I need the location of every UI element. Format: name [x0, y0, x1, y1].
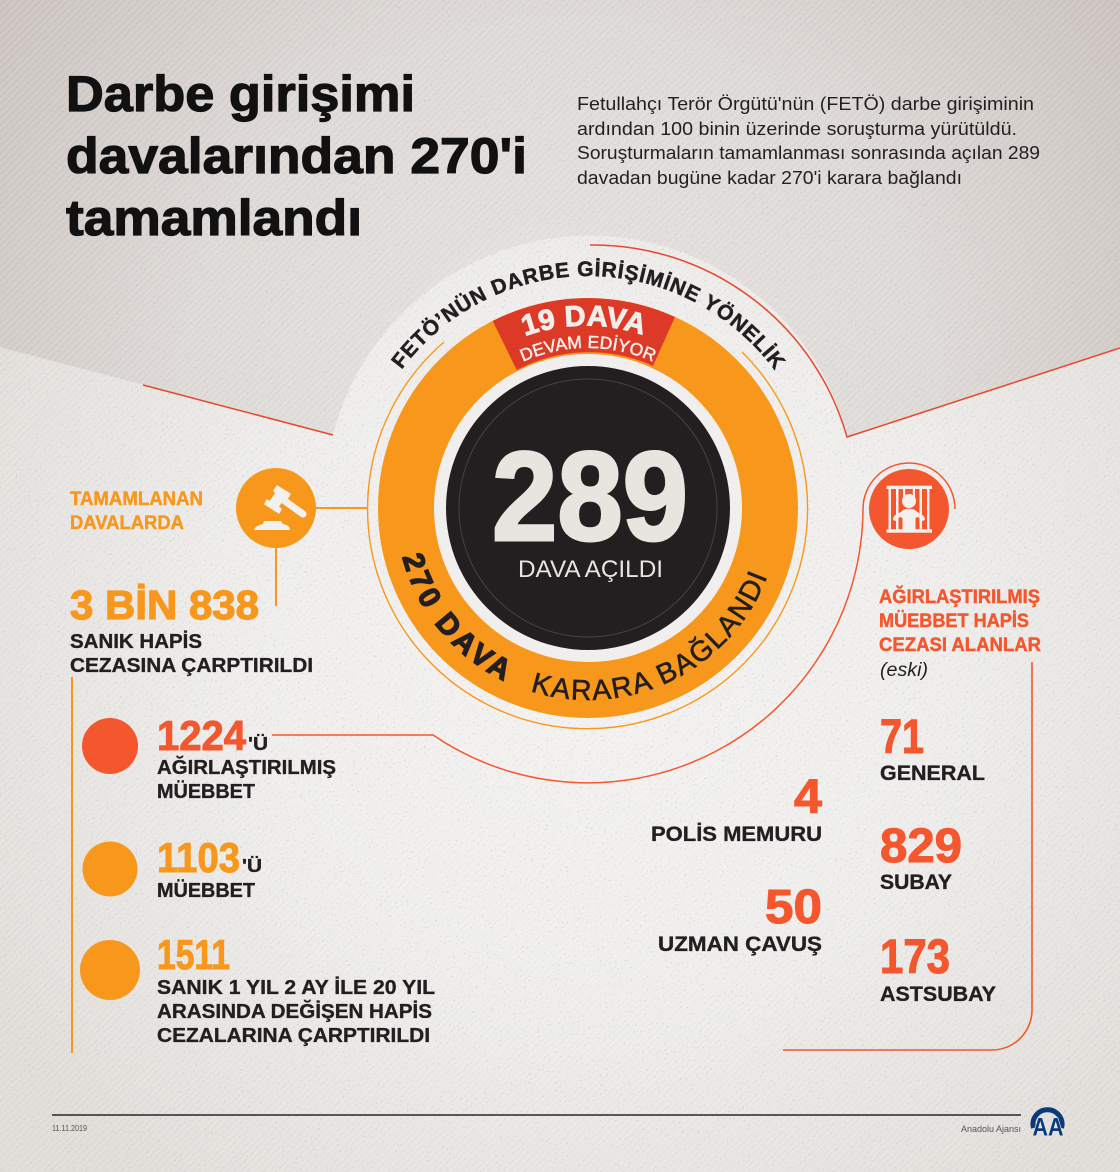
connector: gavel to donut [276, 508, 368, 606]
stat: general: GENERAL [880, 762, 985, 785]
title [66, 66, 527, 246]
icon: AA logo: AA [1032, 1114, 1064, 1142]
intro text: Soruşturmaların tamamlanması sonrasında açılan 289 [577, 143, 1040, 163]
item: 1103 life [82, 834, 262, 902]
stat: non-commissioned officer: 173 [880, 931, 950, 984]
stat: police officer [651, 771, 822, 846]
centre disc [446, 366, 730, 650]
defendants total: SANIK HAPİS [70, 630, 202, 653]
item: 1103 life: MÜEBBET [157, 879, 255, 902]
intro text [577, 94, 1040, 188]
completed cases heading: DAVALARDA [70, 513, 184, 534]
aggravated life heading: (eski) [880, 660, 928, 681]
footer rule [52, 1114, 1021, 1116]
connector: red arc to prison icon [272, 463, 955, 783]
thin orange ring [368, 342, 808, 729]
item: 1224 aggravated life [82, 712, 336, 803]
donut: completed cases [406, 326, 770, 690]
stat: police officer: POLİS MEMURU [651, 823, 822, 846]
intro text: ardından 100 binin üzerinde soruşturma yürütüldü. [577, 119, 1017, 139]
completed cases heading: TAMAMLANAN [70, 489, 203, 510]
completed label: 270 DAVA [402, 552, 508, 682]
title: davalarından 270'i [66, 128, 527, 184]
left vertical line [71, 677, 73, 1053]
item: 1103 life: 1103 [157, 834, 240, 881]
central donut chart: DEVAM EDİYOR [519, 334, 656, 362]
defendants total [70, 582, 313, 677]
stat: specialist sergeant [658, 881, 822, 956]
defendants total: 3 BİN 838 [70, 582, 259, 628]
title: tamamlandı [66, 190, 362, 246]
agency name: Anadolu Ajansı [961, 1124, 1021, 1135]
stat: police officer: 4 [794, 771, 822, 824]
central donut chart [366, 258, 808, 730]
title: Darbe girişimi [66, 66, 415, 122]
item: 1511 prison terms: SANIK 1 YIL 2 AY İLE 20 YIL [157, 976, 435, 999]
stat: general [880, 711, 985, 785]
stat: officer: 829 [880, 820, 962, 873]
red connector lines and arc around the header [143, 245, 1120, 437]
intro text: Fetullahçı Terör Örgütü'nün (FETÖ) darbe girişiminin [577, 94, 1034, 114]
stat: specialist sergeant: 50 [765, 881, 822, 934]
stat: specialist sergeant: UZMAN ÇAVUŞ [658, 933, 822, 956]
icon: gavel [236, 468, 316, 548]
item: 1224 aggravated life: 1224 [157, 712, 247, 759]
item: 1511 prison terms: CEZALARINA ÇARPTIRILDI [157, 1025, 430, 1047]
item: 1224 aggravated life: 'Ü [248, 734, 268, 754]
total label: DAVA AÇILDI [518, 556, 663, 583]
curved heading: FETÖ’NÜN DARBE GİRİŞİMİNE YÖNELİK [390, 258, 786, 371]
stat: general: 71 [880, 711, 924, 764]
item: 1511 prison terms [80, 931, 435, 1047]
aggravated life heading [879, 586, 1041, 681]
item: 1103 life: 'Ü [242, 856, 262, 876]
defendants total: CEZASINA ÇARPTIRILDI [70, 655, 313, 677]
completed cases heading [70, 489, 203, 534]
stat: non-commissioned officer: ASTSUBAY [880, 983, 996, 1006]
ongoing label: 19 DAVA [521, 305, 643, 336]
item: 1224 aggravated life: MÜEBBET [157, 780, 255, 803]
stat: officer [880, 820, 962, 894]
item: 1511 prison terms: 1511 [157, 931, 230, 978]
intro text: davadan bugüne kadar 270'i karara bağlandı [577, 168, 962, 188]
inner light disc [434, 354, 742, 662]
stat: non-commissioned officer [880, 931, 996, 1006]
total number: 289 [492, 426, 688, 567]
date: 11.11.2019 [52, 1123, 87, 1133]
aggravated life heading: AĞIRLAŞTIRILMIŞ [879, 586, 1040, 608]
donut: ongoing cases [493, 298, 675, 370]
central donut chart: KARARA BAĞLANDI [532, 571, 767, 700]
item: 1511 prison terms: ARASINDA DEĞİŞEN HAPİS [157, 999, 432, 1023]
icon: prisoner behind bars [869, 469, 949, 549]
item: 1224 aggravated life: AĞIRLAŞTIRILMIŞ [157, 755, 336, 779]
aggravated life heading: MÜEBBET HAPİS [879, 611, 1029, 632]
aggravated life heading: CEZASI ALANLAR [879, 635, 1041, 656]
stat: officer: SUBAY [880, 871, 952, 894]
right bracket line [783, 662, 1032, 1050]
